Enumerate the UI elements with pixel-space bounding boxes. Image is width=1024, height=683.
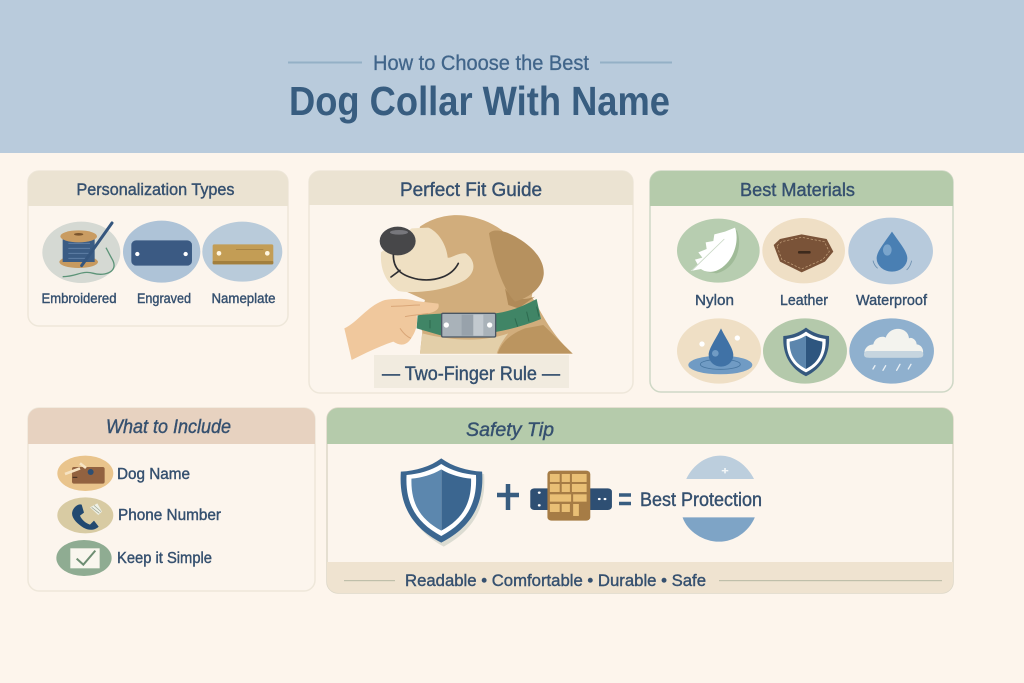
icon: leather patch xyxy=(762,218,845,283)
icon: brass nameplate xyxy=(202,222,282,282)
label: phone number: Phone Number xyxy=(118,507,221,524)
label: keep it simple: Keep it Simple xyxy=(117,550,212,567)
text: best protection: Best Protection xyxy=(640,490,762,511)
caption: two-finger rule: — Two-Finger Rule — xyxy=(382,364,560,385)
panel: personalization types xyxy=(28,171,288,326)
label: nameplate: Nameplate xyxy=(212,290,276,306)
label: nylon: Nylon xyxy=(695,292,734,309)
icon: large shield xyxy=(401,458,484,547)
icon: engraved plate xyxy=(123,221,200,283)
heading: what to include: What to Include xyxy=(106,417,231,438)
caption: two-finger rule xyxy=(374,355,569,388)
subtitle: How to Choose the Best xyxy=(373,52,589,75)
label: embroidered: Embroidered xyxy=(42,290,116,306)
icon: nylon feather xyxy=(677,219,760,283)
icon: collar with buckle xyxy=(530,471,612,521)
equals sign xyxy=(619,495,631,504)
panel: best materials xyxy=(650,171,953,392)
panel: what to include xyxy=(28,408,315,591)
heading: perfect fit guide: Perfect Fit Guide xyxy=(400,180,542,201)
icon: checkbox xyxy=(56,540,112,576)
icon: phone xyxy=(57,497,113,533)
icon: water drop xyxy=(848,218,933,284)
heading: best materials: Best Materials xyxy=(740,180,855,200)
header banner xyxy=(0,0,1024,153)
footer: qualities: Readable • Comfortable • Durable • Safe xyxy=(405,571,706,590)
illustration: dog with collar and hand xyxy=(344,215,573,360)
label: engraved: Engraved xyxy=(137,290,191,306)
panel: perfect fit guide xyxy=(309,171,633,393)
label: waterproof: Waterproof xyxy=(856,292,928,309)
panel: safety tip xyxy=(327,408,953,593)
label: dog name: Dog Name xyxy=(117,466,190,483)
icon: thread spool and needle xyxy=(42,222,120,283)
icon: droplet on ripples xyxy=(677,318,761,384)
title: Dog Collar With Name xyxy=(289,78,670,124)
heading: safety tip: Safety Tip xyxy=(466,420,554,441)
badge: protection circle xyxy=(683,456,755,542)
label: leather: Leather xyxy=(780,292,828,309)
icon: rain cloud xyxy=(849,318,934,384)
icon: dog name tag xyxy=(57,456,113,491)
plus sign xyxy=(497,484,519,510)
icon: shield xyxy=(763,318,847,384)
heading: personalization types: Personalization Types xyxy=(76,180,234,199)
